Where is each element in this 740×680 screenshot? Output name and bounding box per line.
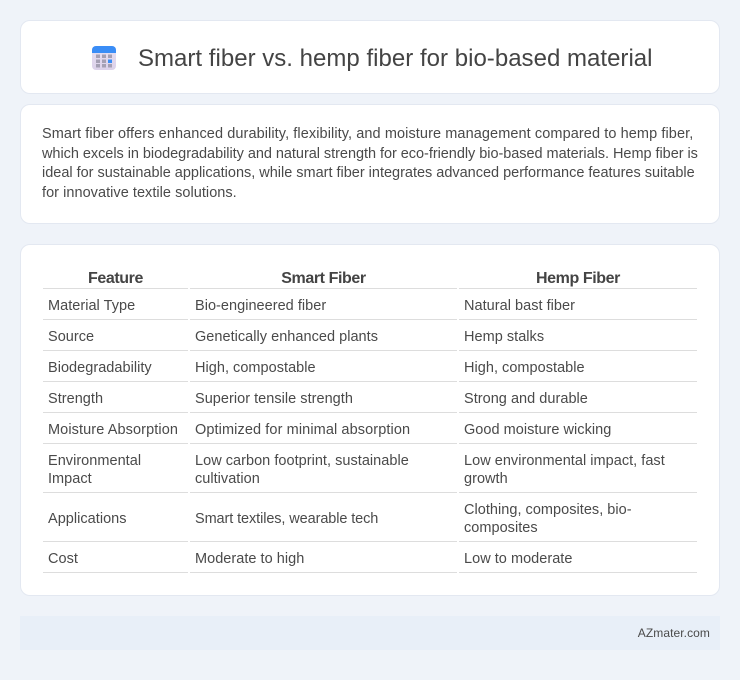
summary text: for innovative textile solutions. xyxy=(42,185,237,201)
comparison table: composites xyxy=(464,520,538,536)
summary text: which excels in biodegradability and natural strength for eco-friendly bio-based materials. Hemp fiber is xyxy=(42,146,698,162)
comparison table: High, compostable xyxy=(464,360,585,376)
summary card xyxy=(20,104,720,224)
comparison table: Moderate to high xyxy=(195,551,304,567)
comparison table: Good moisture wicking xyxy=(464,422,611,438)
comparison table: Smart textiles, wearable tech xyxy=(195,511,378,527)
comparison table: Natural bast fiber xyxy=(464,298,575,314)
summary text: Smart fiber offers enhanced durability, flexibility, and moisture management compared to hemp fiber, xyxy=(42,126,693,142)
comparison table: Low environmental impact, fast xyxy=(464,453,665,469)
row: Environmental Impact xyxy=(48,453,141,487)
comparison table: Superior tensile strength xyxy=(195,391,353,407)
comparison table: Bio-engineered fiber xyxy=(195,298,326,314)
comparison table: Strong and durable xyxy=(464,391,588,407)
icon: calendar xyxy=(92,46,116,70)
header: Smart Fiber: Smart Fiber xyxy=(281,270,366,287)
comparison table: High, compostable xyxy=(195,360,316,376)
row: Biodegradability: Biodegradability xyxy=(48,360,152,376)
table card xyxy=(20,244,720,596)
row: Source: Source xyxy=(48,329,94,345)
summary text: ideal for sustainable applications, while smart fiber integrates advanced performance features suitable xyxy=(42,165,695,181)
row: Strength: Strength xyxy=(48,391,103,407)
summary text xyxy=(42,126,698,201)
title card xyxy=(20,20,720,94)
comparison table: Hemp stalks xyxy=(464,329,544,345)
comparison table: growth xyxy=(464,471,508,487)
row: Applications: Applications xyxy=(48,511,127,527)
header: Hemp Fiber: Hemp Fiber xyxy=(536,270,620,287)
comparison table: Low carbon footprint, sustainable xyxy=(195,453,409,469)
row: Environmental Impact: Environmental xyxy=(48,453,141,469)
row: Material Type: Material Type xyxy=(48,298,135,314)
comparison table: cultivation xyxy=(195,471,260,487)
row: Environmental Impact: Impact xyxy=(48,471,92,487)
title: Smart fiber vs. hemp fiber for bio-based material xyxy=(138,45,653,72)
footer bar xyxy=(20,616,720,650)
comparison table: Low to moderate xyxy=(464,551,572,567)
row: Cost: Cost xyxy=(48,551,78,567)
footer text: AZmater.com xyxy=(638,626,710,640)
comparison table: Optimized for minimal absorption xyxy=(195,422,410,438)
row: Moisture Absorption: Moisture Absorption xyxy=(48,422,178,438)
header: Feature: Feature xyxy=(88,270,143,287)
comparison table: Clothing, composites, bio- xyxy=(464,502,632,518)
comparison table: Genetically enhanced plants xyxy=(195,329,378,345)
